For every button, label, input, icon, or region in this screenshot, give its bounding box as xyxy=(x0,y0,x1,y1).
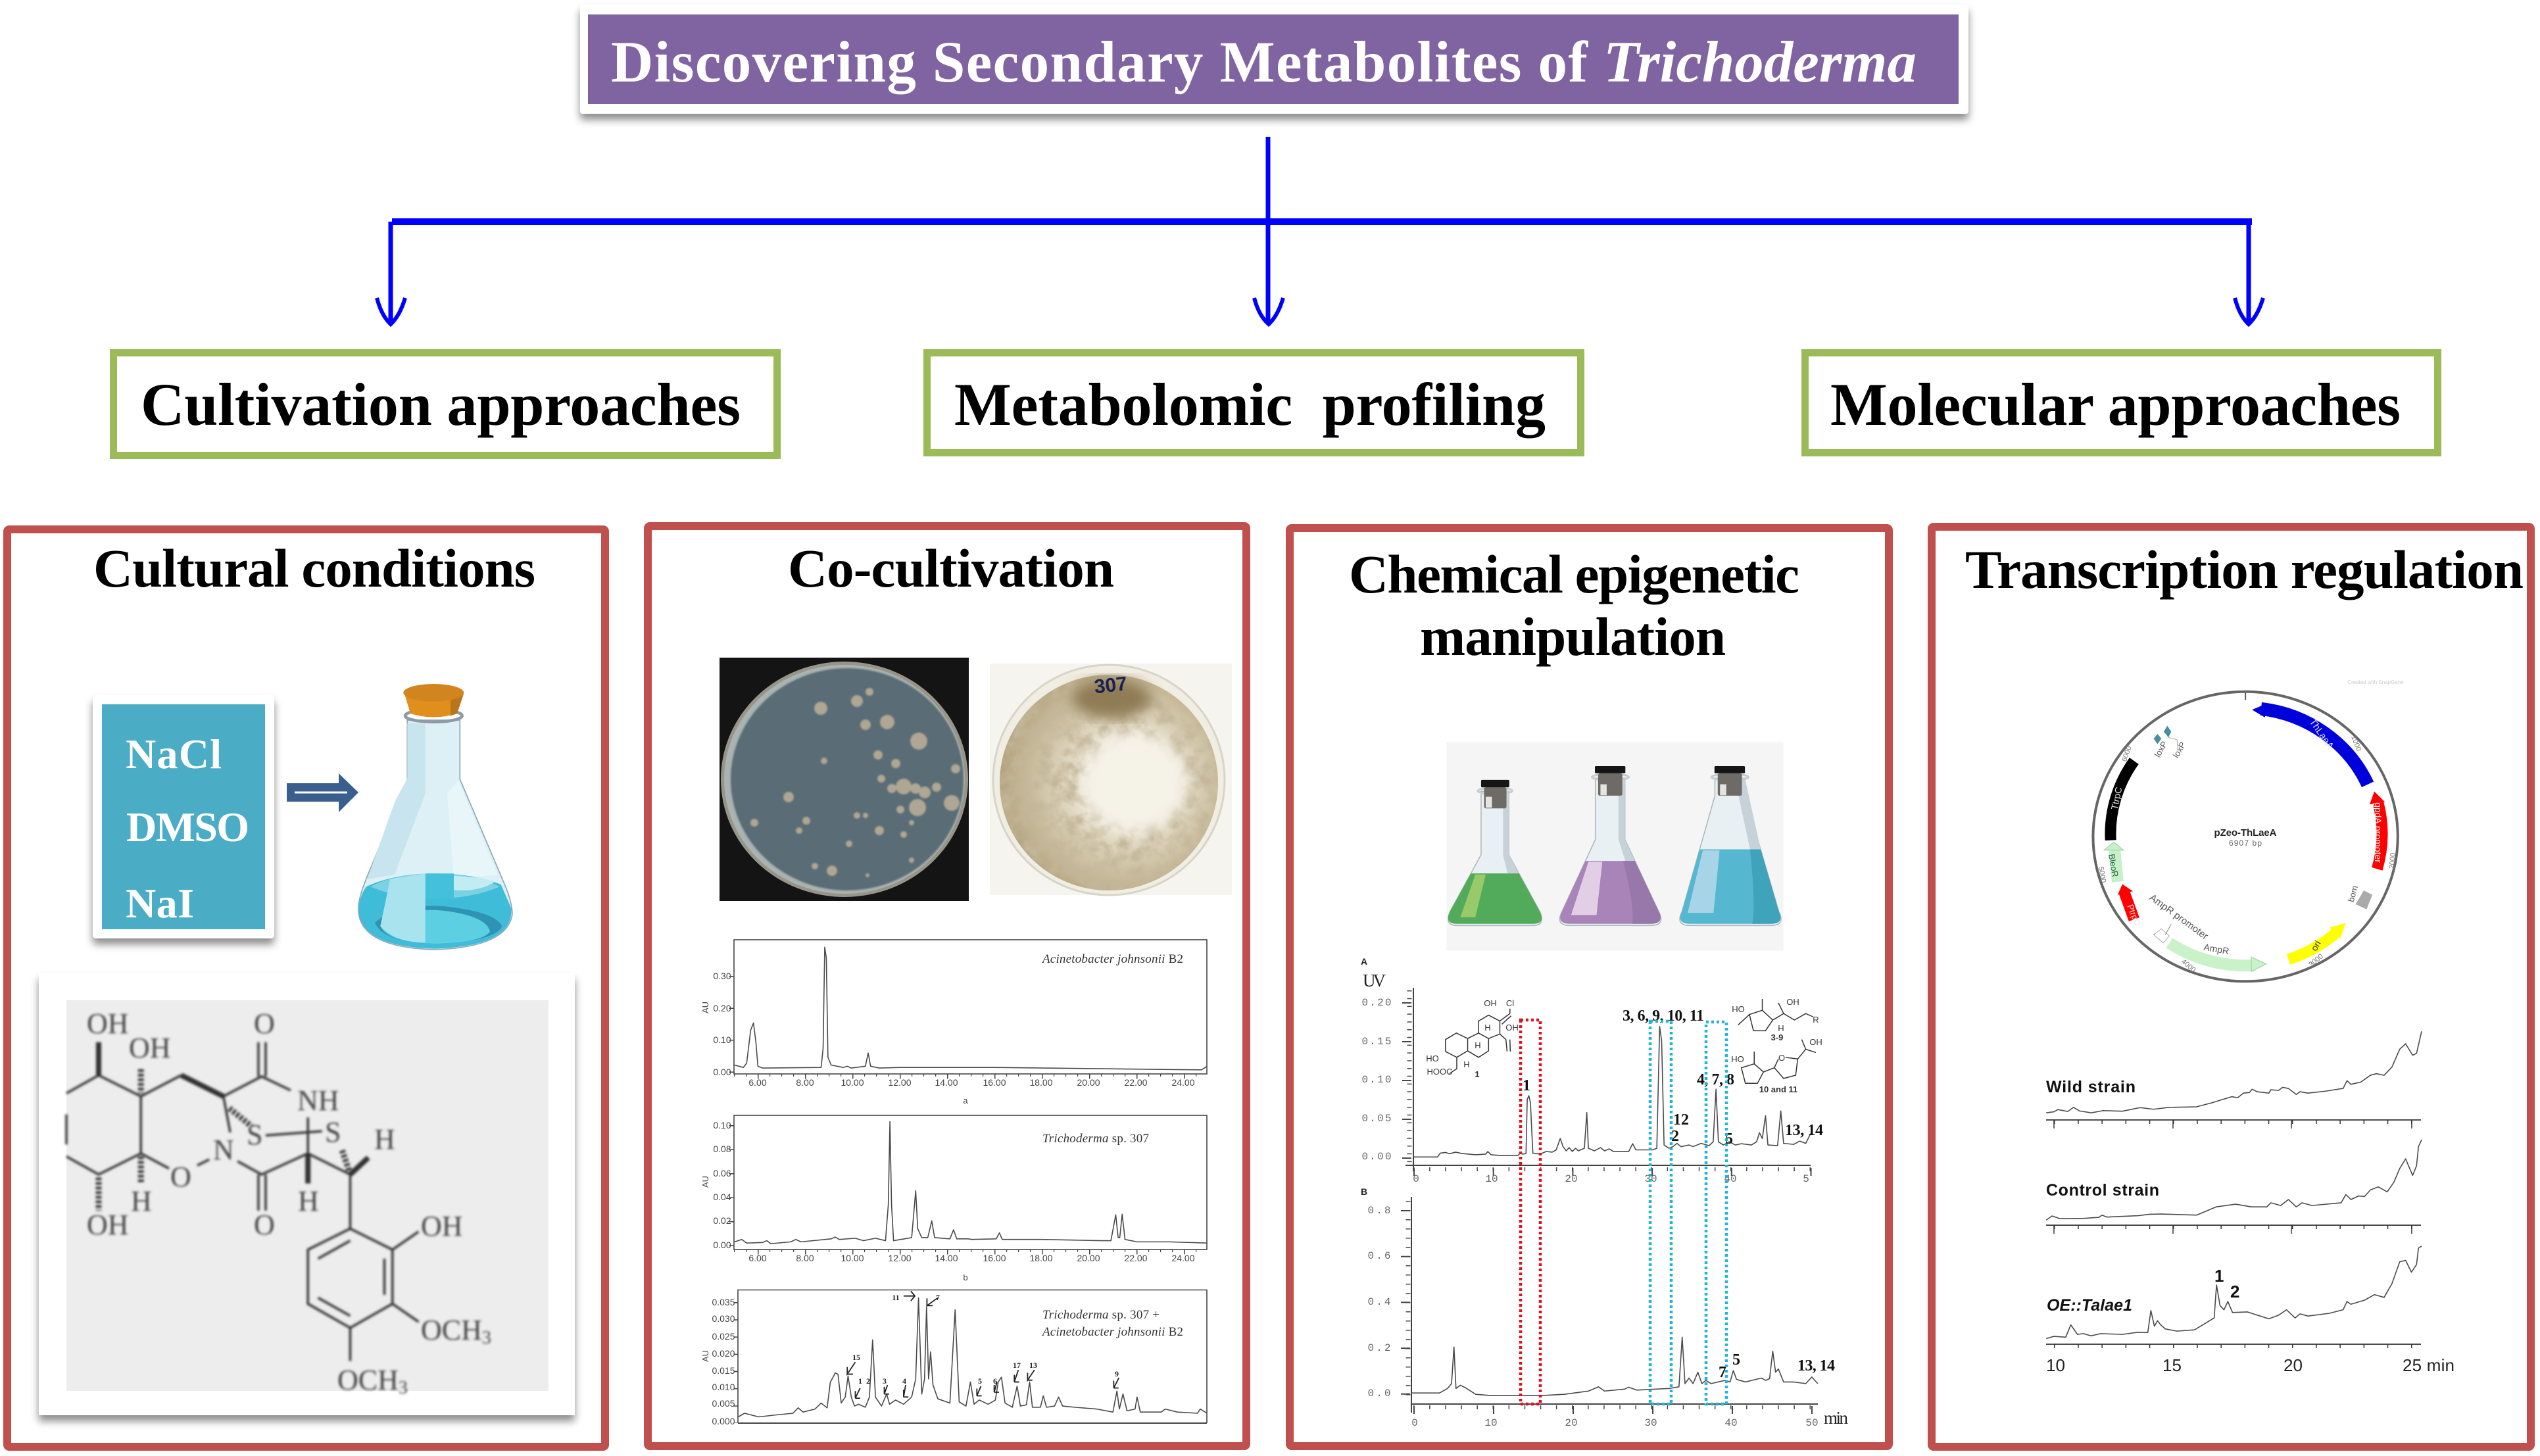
panel: cultural conditions xyxy=(7,529,605,1447)
heading: cultural conditions: Cultural conditions xyxy=(93,538,535,598)
chart: co-culture: 3 xyxy=(883,1376,887,1386)
chart: co-culture: 0.025 xyxy=(712,1331,735,1342)
heading: chemical epigenetic manipulation: Chemical epigenetic xyxy=(1349,544,1799,604)
chemical structure: O xyxy=(170,1161,191,1193)
chart: UV chromatogram A: 5 xyxy=(1725,1130,1733,1148)
chart: UV chromatogram B: 0.4 xyxy=(1368,1296,1390,1308)
chart: Acinetobacter johnsonii B2: 12.00 xyxy=(888,1077,912,1088)
reagent card: NaI xyxy=(126,880,194,927)
arrow connector tree xyxy=(377,137,2263,324)
dotted highlight boxes xyxy=(1521,1020,1726,1404)
chart: co-culture: 9 xyxy=(1115,1369,1119,1378)
category: molecular approaches: Molecular approaches xyxy=(1830,371,2401,438)
chart: UV chromatogram B: 0.2 xyxy=(1368,1342,1390,1354)
chart: Acinetobacter johnsonii B2: 6.00 xyxy=(748,1077,767,1088)
chart: UV chromatogram B: 40 xyxy=(1724,1417,1738,1429)
chemical structure: 3 xyxy=(482,1328,491,1348)
chart: UV chromatogram B: 0 xyxy=(1411,1417,1418,1429)
chart: co-culture: Acinetobacter johnsonii B2 xyxy=(1041,1325,1183,1339)
icon: three coloured flasks xyxy=(1446,742,1784,951)
plasmid map: PtrpC xyxy=(2125,903,2143,927)
chart: UV chromatogram B: 20 xyxy=(1565,1417,1578,1429)
chart: UV chromatogram A: 0.20 xyxy=(1361,997,1392,1009)
chart: Acinetobacter johnsonii B2: 0.00 xyxy=(713,1067,731,1077)
chemical structure: OCH xyxy=(421,1314,482,1346)
chart: Trichoderma sp. 307: 10.00 xyxy=(841,1253,864,1263)
chart: Acinetobacter johnsonii B2: 14.00 xyxy=(935,1077,958,1088)
photo: trichoderma petri dish: 307 xyxy=(1093,673,1128,698)
chart: co-culture: 6 xyxy=(993,1376,997,1386)
chart: UV chromatogram B: 10 xyxy=(1484,1417,1498,1429)
chemical structures on chart A: O xyxy=(1778,1053,1785,1063)
chart: Acinetobacter johnsonii B2: 20.00 xyxy=(1077,1077,1100,1088)
chart: co-culture: 11 xyxy=(892,1293,900,1302)
chart: co-culture: 1 xyxy=(858,1376,862,1386)
plasmid map: 6000 xyxy=(2120,745,2134,763)
chart: Acinetobacter johnsonii B2: 0.30 xyxy=(713,971,731,981)
chart: strain chromatograms: 10 xyxy=(2046,1355,2065,1375)
chart: Trichoderma sp. 307: 6.00 xyxy=(748,1253,767,1263)
chemical structures on chart A: HO xyxy=(1731,1054,1744,1064)
chemical structure card xyxy=(39,973,575,1415)
chart: Acinetobacter johnsonii B2: 24.00 xyxy=(1171,1077,1195,1088)
plasmid map: ori xyxy=(2308,938,2323,953)
chart: co-culture: 0.005 xyxy=(712,1398,735,1409)
chemical structures on chart A xyxy=(1426,997,1822,1094)
chart: Trichoderma sp. 307: 0.04 xyxy=(713,1192,731,1202)
chemical structures on chart A: 3-9 xyxy=(1771,1032,1783,1042)
chemical structures on chart A: HOOC xyxy=(1427,1067,1452,1077)
chart: Trichoderma sp. 307: 16.00 xyxy=(983,1253,1006,1263)
chart: Trichoderma sp. 307: 18.00 xyxy=(1029,1253,1053,1263)
chart: UV chromatogram A: 4, 7, 8 xyxy=(1697,1071,1734,1088)
chart: strain chromatograms: 25 min xyxy=(2403,1355,2455,1375)
chart: UV chromatogram A: 5 xyxy=(1803,1173,1809,1185)
chart: Trichoderma sp. 307: 14.00 xyxy=(935,1253,958,1263)
chart: Acinetobacter johnsonii B2: 0.20 xyxy=(713,1003,731,1013)
chemical structure: NH xyxy=(297,1084,339,1117)
chart: UV chromatogram A: UV xyxy=(1363,971,1386,990)
chart: co-culture: 0.030 xyxy=(712,1313,735,1324)
chart: Acinetobacter johnsonii B2: 10.00 xyxy=(841,1077,864,1088)
chart: co-culture: 15 xyxy=(852,1353,860,1362)
chemical structure: OH xyxy=(421,1210,463,1242)
chart: UV chromatogram B: 5 xyxy=(1732,1351,1740,1369)
chemical structures on chart A: HO xyxy=(1426,1054,1439,1063)
chart: co-culture xyxy=(700,1290,1207,1426)
chart: co-culture: 0.035 xyxy=(712,1297,735,1307)
chart: Acinetobacter johnsonii B2: Acinetobacter johnsonii B2 xyxy=(1041,952,1183,966)
chart: UV chromatogram A: A xyxy=(1361,956,1367,967)
plasmid map xyxy=(2093,679,2404,981)
chart: co-culture: 0.000 xyxy=(712,1416,735,1426)
category: molecular approaches xyxy=(1805,352,2437,452)
chart: strain chromatograms: 15 xyxy=(2162,1355,2182,1375)
chart: UV chromatogram A: 30 xyxy=(1644,1173,1657,1185)
chart: co-culture: 0.010 xyxy=(712,1382,735,1392)
chart: UV chromatogram B: 0.6 xyxy=(1368,1250,1390,1262)
title banner xyxy=(580,5,1968,114)
chart: UV chromatogram A: 40 xyxy=(1724,1173,1737,1185)
chart: Acinetobacter johnsonii B2: 0.10 xyxy=(713,1034,731,1045)
chart: UV chromatogram B: B xyxy=(1361,1186,1367,1197)
chart: Trichoderma sp. 307: Trichoderma sp. 307 xyxy=(1042,1132,1149,1146)
chart: co-culture: 0.020 xyxy=(712,1348,735,1359)
title banner: Trichoderma xyxy=(1603,30,1917,95)
icon: purple flask xyxy=(1559,766,1661,925)
chart: UV chromatogram B: 0.8 xyxy=(1368,1205,1390,1217)
plasmid map: gpdA promoter xyxy=(2373,802,2383,863)
plasmid map: ThLaeA xyxy=(2307,717,2336,752)
chart: Trichoderma sp. 307: 0.02 xyxy=(713,1215,731,1226)
reagent card: NaCl xyxy=(126,731,222,777)
chemical structures on chart A: OH xyxy=(1484,998,1497,1008)
category: cultivation approaches xyxy=(113,352,777,455)
chart: Trichoderma sp. 307: b xyxy=(963,1273,968,1282)
chart: co-culture: 2 xyxy=(866,1376,870,1386)
chart: Acinetobacter johnsonii B2: 22.00 xyxy=(1124,1077,1148,1088)
chart: UV chromatogram A: 0.10 xyxy=(1361,1074,1392,1086)
chart: UV chromatogram A: 12 xyxy=(1673,1111,1689,1128)
chemical structure: H xyxy=(374,1123,395,1155)
plasmid map: TtrpC xyxy=(2109,786,2124,811)
chemical structures on chart A: OH xyxy=(1505,1023,1519,1032)
chart: UV chromatogram A: 0.05 xyxy=(1361,1113,1392,1125)
chemical structures on chart A: OH xyxy=(1809,1037,1822,1047)
panel: co-cultivation xyxy=(648,526,1246,1446)
chart: co-culture: 7 xyxy=(936,1293,940,1302)
chart: strain chromatograms: 20 xyxy=(2284,1355,2303,1375)
reagent card xyxy=(93,695,274,938)
chart: Acinetobacter johnsonii B2: 8.00 xyxy=(796,1077,814,1088)
chemical structures on chart A: H xyxy=(1475,1040,1481,1050)
chart: Trichoderma sp. 307: 0.10 xyxy=(713,1120,731,1130)
chemical structures on chart A: H xyxy=(1484,1023,1491,1032)
chart: strain chromatograms xyxy=(2046,1031,2455,1375)
chart: co-culture: 13 xyxy=(1029,1361,1037,1370)
chart: UV chromatogram A: 20 xyxy=(1565,1173,1578,1185)
chart: Trichoderma sp. 307: 0.00 xyxy=(713,1240,731,1250)
photo: bacterial petri dish xyxy=(720,658,969,901)
chart: Trichoderma sp. 307: 24.00 xyxy=(1171,1253,1195,1263)
chart: Trichoderma sp. 307: AU xyxy=(700,1176,710,1188)
chart: strain chromatograms: OE::Talae1 xyxy=(2047,1296,2132,1315)
chart: co-culture: 4 xyxy=(902,1376,906,1386)
chemical structure: S xyxy=(247,1119,262,1151)
plasmid map: 5000 xyxy=(2097,866,2107,883)
reagent card: DMSO xyxy=(126,804,249,850)
chart: co-culture: AU xyxy=(700,1350,710,1362)
chemical structure: O xyxy=(254,1007,275,1040)
category: metabolomic profiling xyxy=(927,352,1581,452)
plasmid map: AmpR xyxy=(2203,942,2230,956)
chart: UV chromatogram A: 10 xyxy=(1485,1173,1498,1185)
chemical structure: S xyxy=(325,1116,341,1148)
plasmid map: 6907 bp xyxy=(2229,838,2262,848)
plasmid map: loxP xyxy=(2153,740,2169,759)
chart: UV chromatogram A: 1 xyxy=(1523,1077,1530,1094)
chart: UV chromatogram A: 3, 6, 9, 10, 11 xyxy=(1623,1007,1704,1025)
chart: Trichoderma sp. 307: 22.00 xyxy=(1124,1253,1148,1263)
chart: Trichoderma sp. 307: 8.00 xyxy=(796,1253,814,1263)
chemical structures on chart A: H xyxy=(1778,1023,1784,1033)
chart: Trichoderma sp. 307: 0.08 xyxy=(713,1144,731,1154)
category: metabolomic profiling: Metabolomic profiling xyxy=(954,371,1546,438)
heading: chemical epigenetic manipulation xyxy=(1349,544,1799,667)
plasmid map: 2000 xyxy=(2388,852,2397,869)
chart: UV chromatogram B: 13, 14 xyxy=(1797,1357,1835,1374)
chart: strain chromatograms: Wild strain xyxy=(2046,1078,2136,1096)
chart: UV chromatogram B: 30 xyxy=(1644,1417,1657,1429)
icon: blue flask xyxy=(1680,766,1781,925)
chemical structure: OCH xyxy=(337,1364,399,1396)
chemical structure xyxy=(66,1007,491,1398)
chemical structure: O xyxy=(254,1209,275,1241)
plasmid map: 1000 xyxy=(2349,735,2362,752)
category: cultivation approaches: Cultivation approaches xyxy=(141,371,741,438)
chart: UV chromatogram A: 0.15 xyxy=(1361,1036,1392,1048)
chart: Trichoderma sp. 307: 12.00 xyxy=(888,1253,912,1263)
chart: Trichoderma sp. 307 xyxy=(700,1115,1207,1282)
chart: Acinetobacter johnsonii B2: 16.00 xyxy=(983,1077,1006,1088)
chart: Trichoderma sp. 307: 0.06 xyxy=(713,1168,731,1178)
chemical structure: OH xyxy=(87,1007,129,1040)
chart: co-culture: Trichoderma sp. 307 + xyxy=(1042,1308,1160,1322)
chart: UV chromatogram A: 2 xyxy=(1671,1128,1679,1145)
heading: co-cultivation: Co-cultivation xyxy=(788,538,1114,598)
icon: blue flask with cork xyxy=(358,684,512,950)
chart: Acinetobacter johnsonii B2: AU xyxy=(700,1002,710,1013)
chemical structures on chart A: HO xyxy=(1732,1004,1745,1014)
chart: UV chromatogram B: 0.0 xyxy=(1368,1388,1390,1399)
plasmid map: 4000 xyxy=(2180,958,2197,974)
heading: chemical epigenetic manipulation: manipulation xyxy=(1420,606,1726,667)
plasmid map: pZeo-ThLaeA xyxy=(2214,827,2277,838)
chemical structures on chart A: H xyxy=(1463,1059,1470,1069)
chart: UV chromatogram A: 13, 14 xyxy=(1785,1122,1823,1139)
icon: green flask xyxy=(1448,780,1542,925)
panel: transcription regulation xyxy=(1932,527,2531,1447)
chart: Trichoderma sp. 307: 20.00 xyxy=(1077,1253,1100,1263)
chemical structure: H xyxy=(131,1185,152,1217)
chart: co-culture: 5 xyxy=(978,1376,982,1386)
chart: co-culture: 0.015 xyxy=(712,1365,735,1376)
chart: Acinetobacter johnsonii B2: a xyxy=(963,1096,968,1105)
chart: strain chromatograms: Control strain xyxy=(2046,1181,2159,1200)
chart: UV chromatogram A: 0 xyxy=(1413,1173,1419,1185)
chemical structures on chart A: 1 xyxy=(1475,1069,1480,1079)
chart: Acinetobacter johnsonii B2 xyxy=(700,940,1207,1105)
chemical structures on chart A: Cl xyxy=(1506,998,1514,1008)
plasmid map: bom xyxy=(2346,885,2360,903)
chemical structure: H xyxy=(298,1185,319,1217)
chart: UV chromatogram A xyxy=(1361,956,1823,1185)
chart: UV chromatogram A: 0.00 xyxy=(1361,1151,1392,1163)
chart: UV chromatogram B: 7 xyxy=(1719,1364,1726,1381)
chemical structure: OH xyxy=(129,1032,171,1064)
chemical structures on chart A: OH xyxy=(1786,997,1799,1007)
plasmid map: loxP xyxy=(2171,740,2187,760)
chemical structures on chart A: 10 and 11 xyxy=(1759,1084,1797,1094)
chart: strain chromatograms: 2 xyxy=(2230,1282,2239,1301)
plasmid map: BleoR xyxy=(2107,853,2120,878)
heading: transcription regulation: Transcription regulation xyxy=(1965,539,2524,600)
chemical structure: OH xyxy=(87,1209,129,1241)
chart: UV chromatogram B xyxy=(1361,1186,1848,1429)
chart: co-culture: 17 xyxy=(1013,1361,1021,1370)
title banner: Discovering Secondary Metabolites of xyxy=(611,30,1588,95)
arrow: reagents to flask xyxy=(287,773,358,812)
chemical structure: N xyxy=(213,1134,234,1166)
chart: UV chromatogram B: 50 xyxy=(1805,1417,1819,1429)
chemical structure: 3 xyxy=(399,1378,408,1398)
plasmid map: 3000 xyxy=(2307,952,2325,969)
panel: chemical epigenetic manipulation xyxy=(1290,528,1889,1446)
plasmid map: AmpR promoter xyxy=(2147,892,2210,942)
chemical structures on chart A: R xyxy=(1813,1015,1819,1025)
chart: Acinetobacter johnsonii B2: 18.00 xyxy=(1029,1077,1053,1088)
plasmid map: Created with SnapGene xyxy=(2347,679,2404,685)
photo: trichoderma petri dish xyxy=(990,664,1232,895)
chart: UV chromatogram B: min xyxy=(1824,1408,1848,1428)
chart: strain chromatograms: 1 xyxy=(2214,1266,2224,1286)
